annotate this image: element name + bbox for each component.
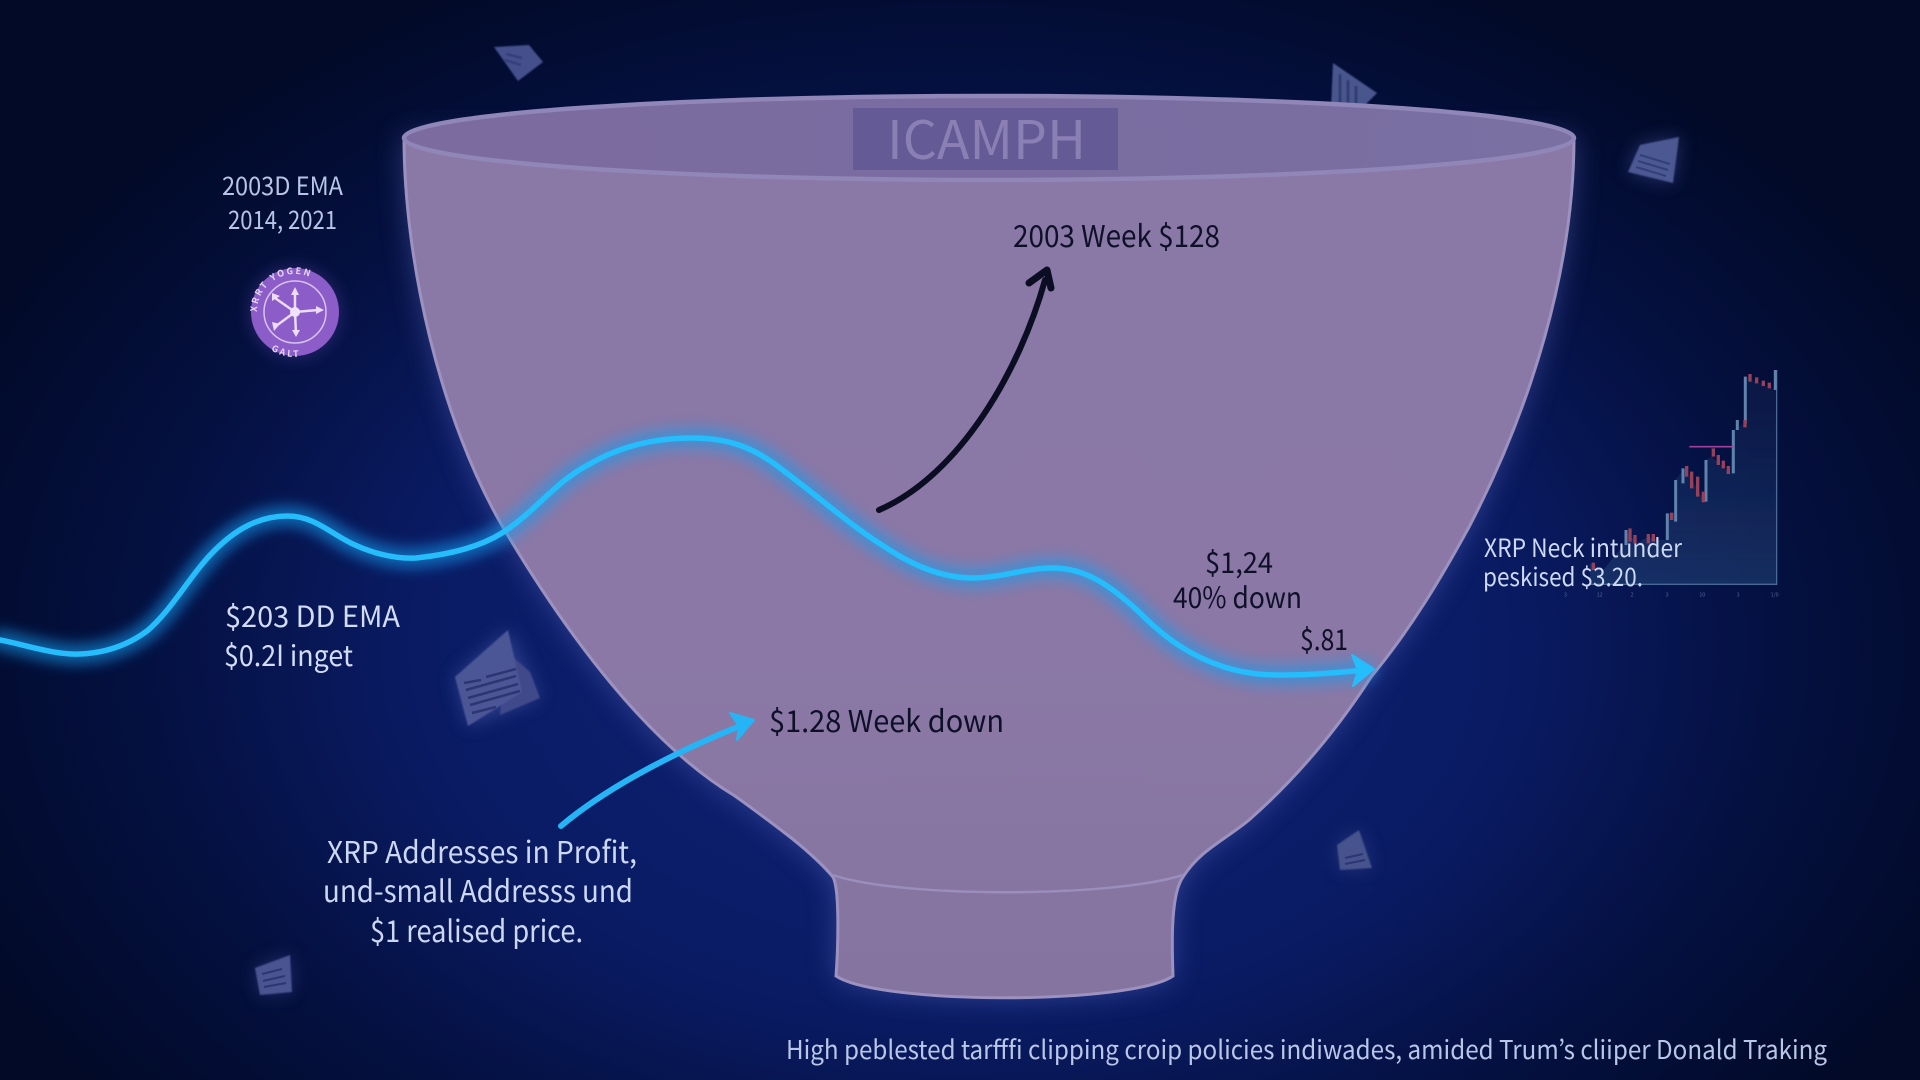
icon: purple coin: XRRT YOGEN xyxy=(250,267,311,312)
icon: purple coin: GALT xyxy=(272,346,298,357)
text: XRP Neck note: peskised $3.20. xyxy=(1483,558,1643,594)
funnel bowl xyxy=(404,96,1574,998)
chart area xyxy=(1590,370,1777,584)
axis ticks: 1/0 xyxy=(1771,591,1779,599)
text: XRP addresses callout xyxy=(323,828,637,951)
text: XRP addresses callout: und-small Addresss und xyxy=(323,867,633,911)
black rising arrow xyxy=(879,270,1051,510)
icon: document bottom right xyxy=(1337,830,1372,870)
text: 2003D EMA dates: 2003D EMA xyxy=(222,167,344,203)
icon: document left xyxy=(455,630,540,726)
text: 1,24 40% down: 40% down xyxy=(1173,575,1302,617)
axis ticks: 3 xyxy=(1737,591,1740,599)
text: 1.28 Week down: $1.28 Week down xyxy=(769,697,1004,741)
icon: document right xyxy=(1628,137,1679,183)
text: 2003D EMA dates xyxy=(222,167,344,237)
text: 2003 Week price: 2003 Week $128 xyxy=(1013,212,1220,256)
falling candles xyxy=(1593,374,1769,570)
text: 1,24 40% down xyxy=(1173,540,1302,617)
icon: purple coin xyxy=(243,260,346,364)
text: XRP addresses callout: $1 realised price. xyxy=(370,907,583,951)
footer caption: High peblested tarfffi clipping croip policies indiwades, amided Trum’s cliiper Donald Traking xyxy=(786,1030,1827,1067)
text: DD EMA label: $0.2I inget xyxy=(224,633,353,675)
icon: document bottom left xyxy=(255,955,292,995)
text: 2003D EMA dates: 2014, 2021 xyxy=(228,201,337,237)
rising candles xyxy=(1626,370,1775,545)
text: XRP Neck note xyxy=(1483,529,1682,594)
resistance line xyxy=(1689,444,1733,449)
axis ticks: 2 xyxy=(1631,591,1634,599)
text: XRP addresses callout: XRP Addresses in Profit, xyxy=(327,828,637,872)
bowl body xyxy=(404,137,1574,998)
axis ticks: 12 xyxy=(1597,591,1603,599)
cyan price line with arrow xyxy=(0,438,1374,686)
axis ticks xyxy=(1564,591,1779,599)
axis ticks: 10 xyxy=(1699,591,1705,599)
text: XRP Neck note: XRP Neck intunder xyxy=(1484,529,1682,565)
neck line xyxy=(833,875,1183,892)
chart baseline and edge xyxy=(1590,370,1777,584)
text: 1,24 40% down: $1,24 xyxy=(1205,540,1273,582)
bowl outer glow xyxy=(404,137,1574,998)
axis ticks: 3 xyxy=(1666,591,1669,599)
text: .81: $.81 xyxy=(1300,617,1348,659)
text: DD EMA label xyxy=(224,594,400,675)
icon: document top right xyxy=(1331,63,1377,108)
arrowhead xyxy=(1352,655,1374,686)
rim xyxy=(404,96,1574,180)
axis ticks: 3 xyxy=(1564,591,1567,599)
candlestick chart xyxy=(1564,370,1779,599)
text: DD EMA label: $203 DD EMA xyxy=(225,594,400,636)
icon: document top left xyxy=(494,45,543,81)
cyan callout arrow xyxy=(561,713,754,826)
funnel label: ICAMPH: ICAMPH xyxy=(887,99,1086,175)
